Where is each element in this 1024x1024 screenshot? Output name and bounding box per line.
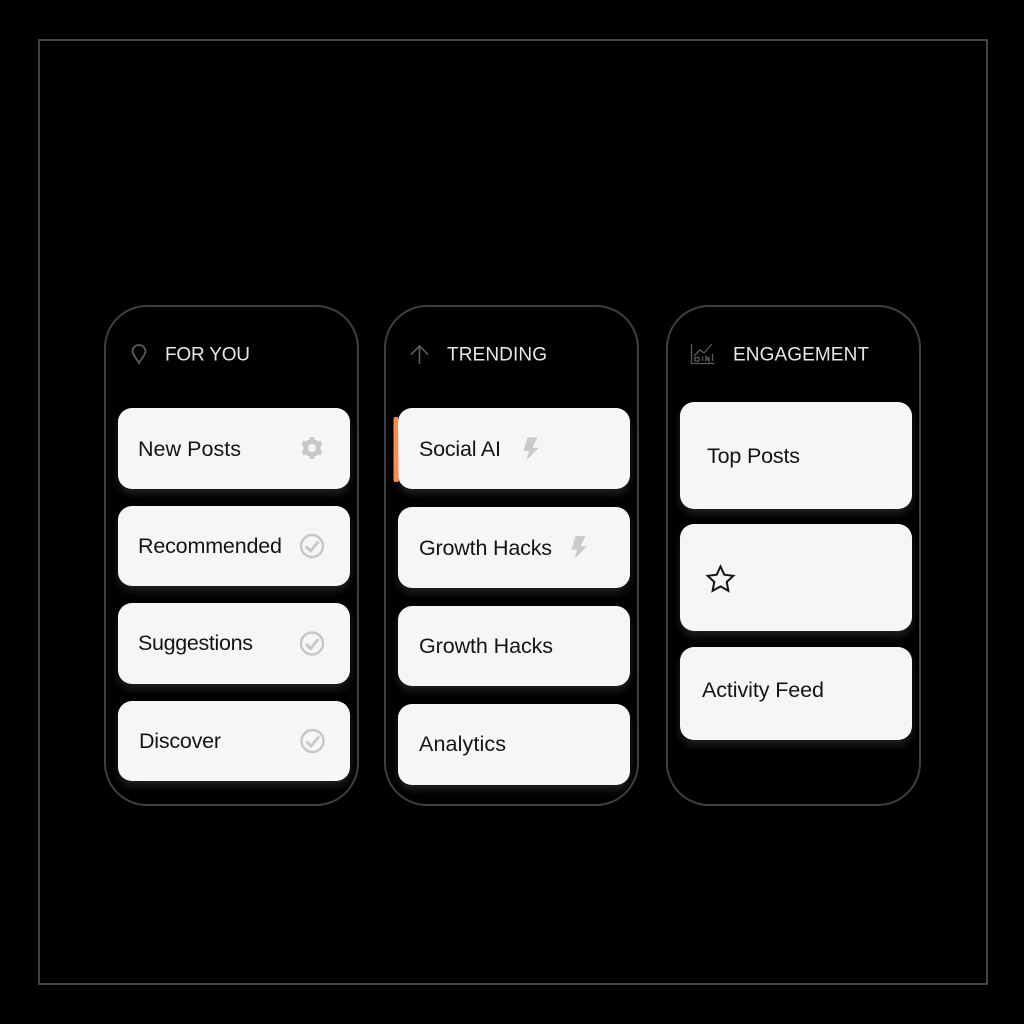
icon: location pin	[132, 345, 146, 363]
accent bar: orange	[394, 417, 398, 482]
card: recommended: Recommended	[138, 534, 282, 558]
icon: check circle	[301, 632, 323, 654]
panel: for you	[105, 306, 358, 805]
icon: bolt	[571, 536, 587, 559]
card: new posts	[118, 408, 350, 489]
card: social ai: Social AI	[419, 437, 501, 461]
card: analytics: Analytics	[419, 732, 506, 756]
panel: trending	[385, 306, 638, 805]
card: top posts	[680, 402, 912, 509]
card: activity feed: Activity Feed	[702, 678, 824, 702]
heading: for you: FOR YOU	[165, 344, 250, 366]
icon: check circle	[301, 535, 323, 557]
card: discover	[118, 701, 350, 781]
heading: trending: TRENDING	[447, 344, 547, 366]
icon: check circle	[302, 730, 324, 752]
card: growth hacks	[398, 507, 630, 588]
card: star	[680, 524, 912, 631]
card: suggestions	[118, 603, 350, 684]
icon: star	[708, 566, 733, 591]
card: top posts: Top Posts	[707, 444, 800, 468]
card: suggestions: Suggestions	[138, 631, 253, 655]
card: analytics	[398, 704, 630, 785]
card: discover: Discover	[139, 729, 221, 753]
card: recommended	[118, 506, 350, 586]
icon: gear	[302, 437, 322, 459]
card: growth hacks 2	[398, 606, 630, 686]
panel: engagement	[667, 306, 920, 805]
icon: bolt	[523, 437, 539, 460]
card: new posts: New Posts	[138, 437, 241, 461]
card: activity feed	[680, 647, 912, 740]
card: growth hacks: Growth Hacks	[419, 536, 552, 560]
icon: up arrow	[411, 346, 428, 364]
heading: engagement: ENGAGEMENT	[733, 344, 869, 366]
icon: chart	[692, 344, 714, 364]
card: social ai	[398, 408, 630, 489]
card: growth hacks 2: Growth Hacks	[419, 634, 553, 658]
